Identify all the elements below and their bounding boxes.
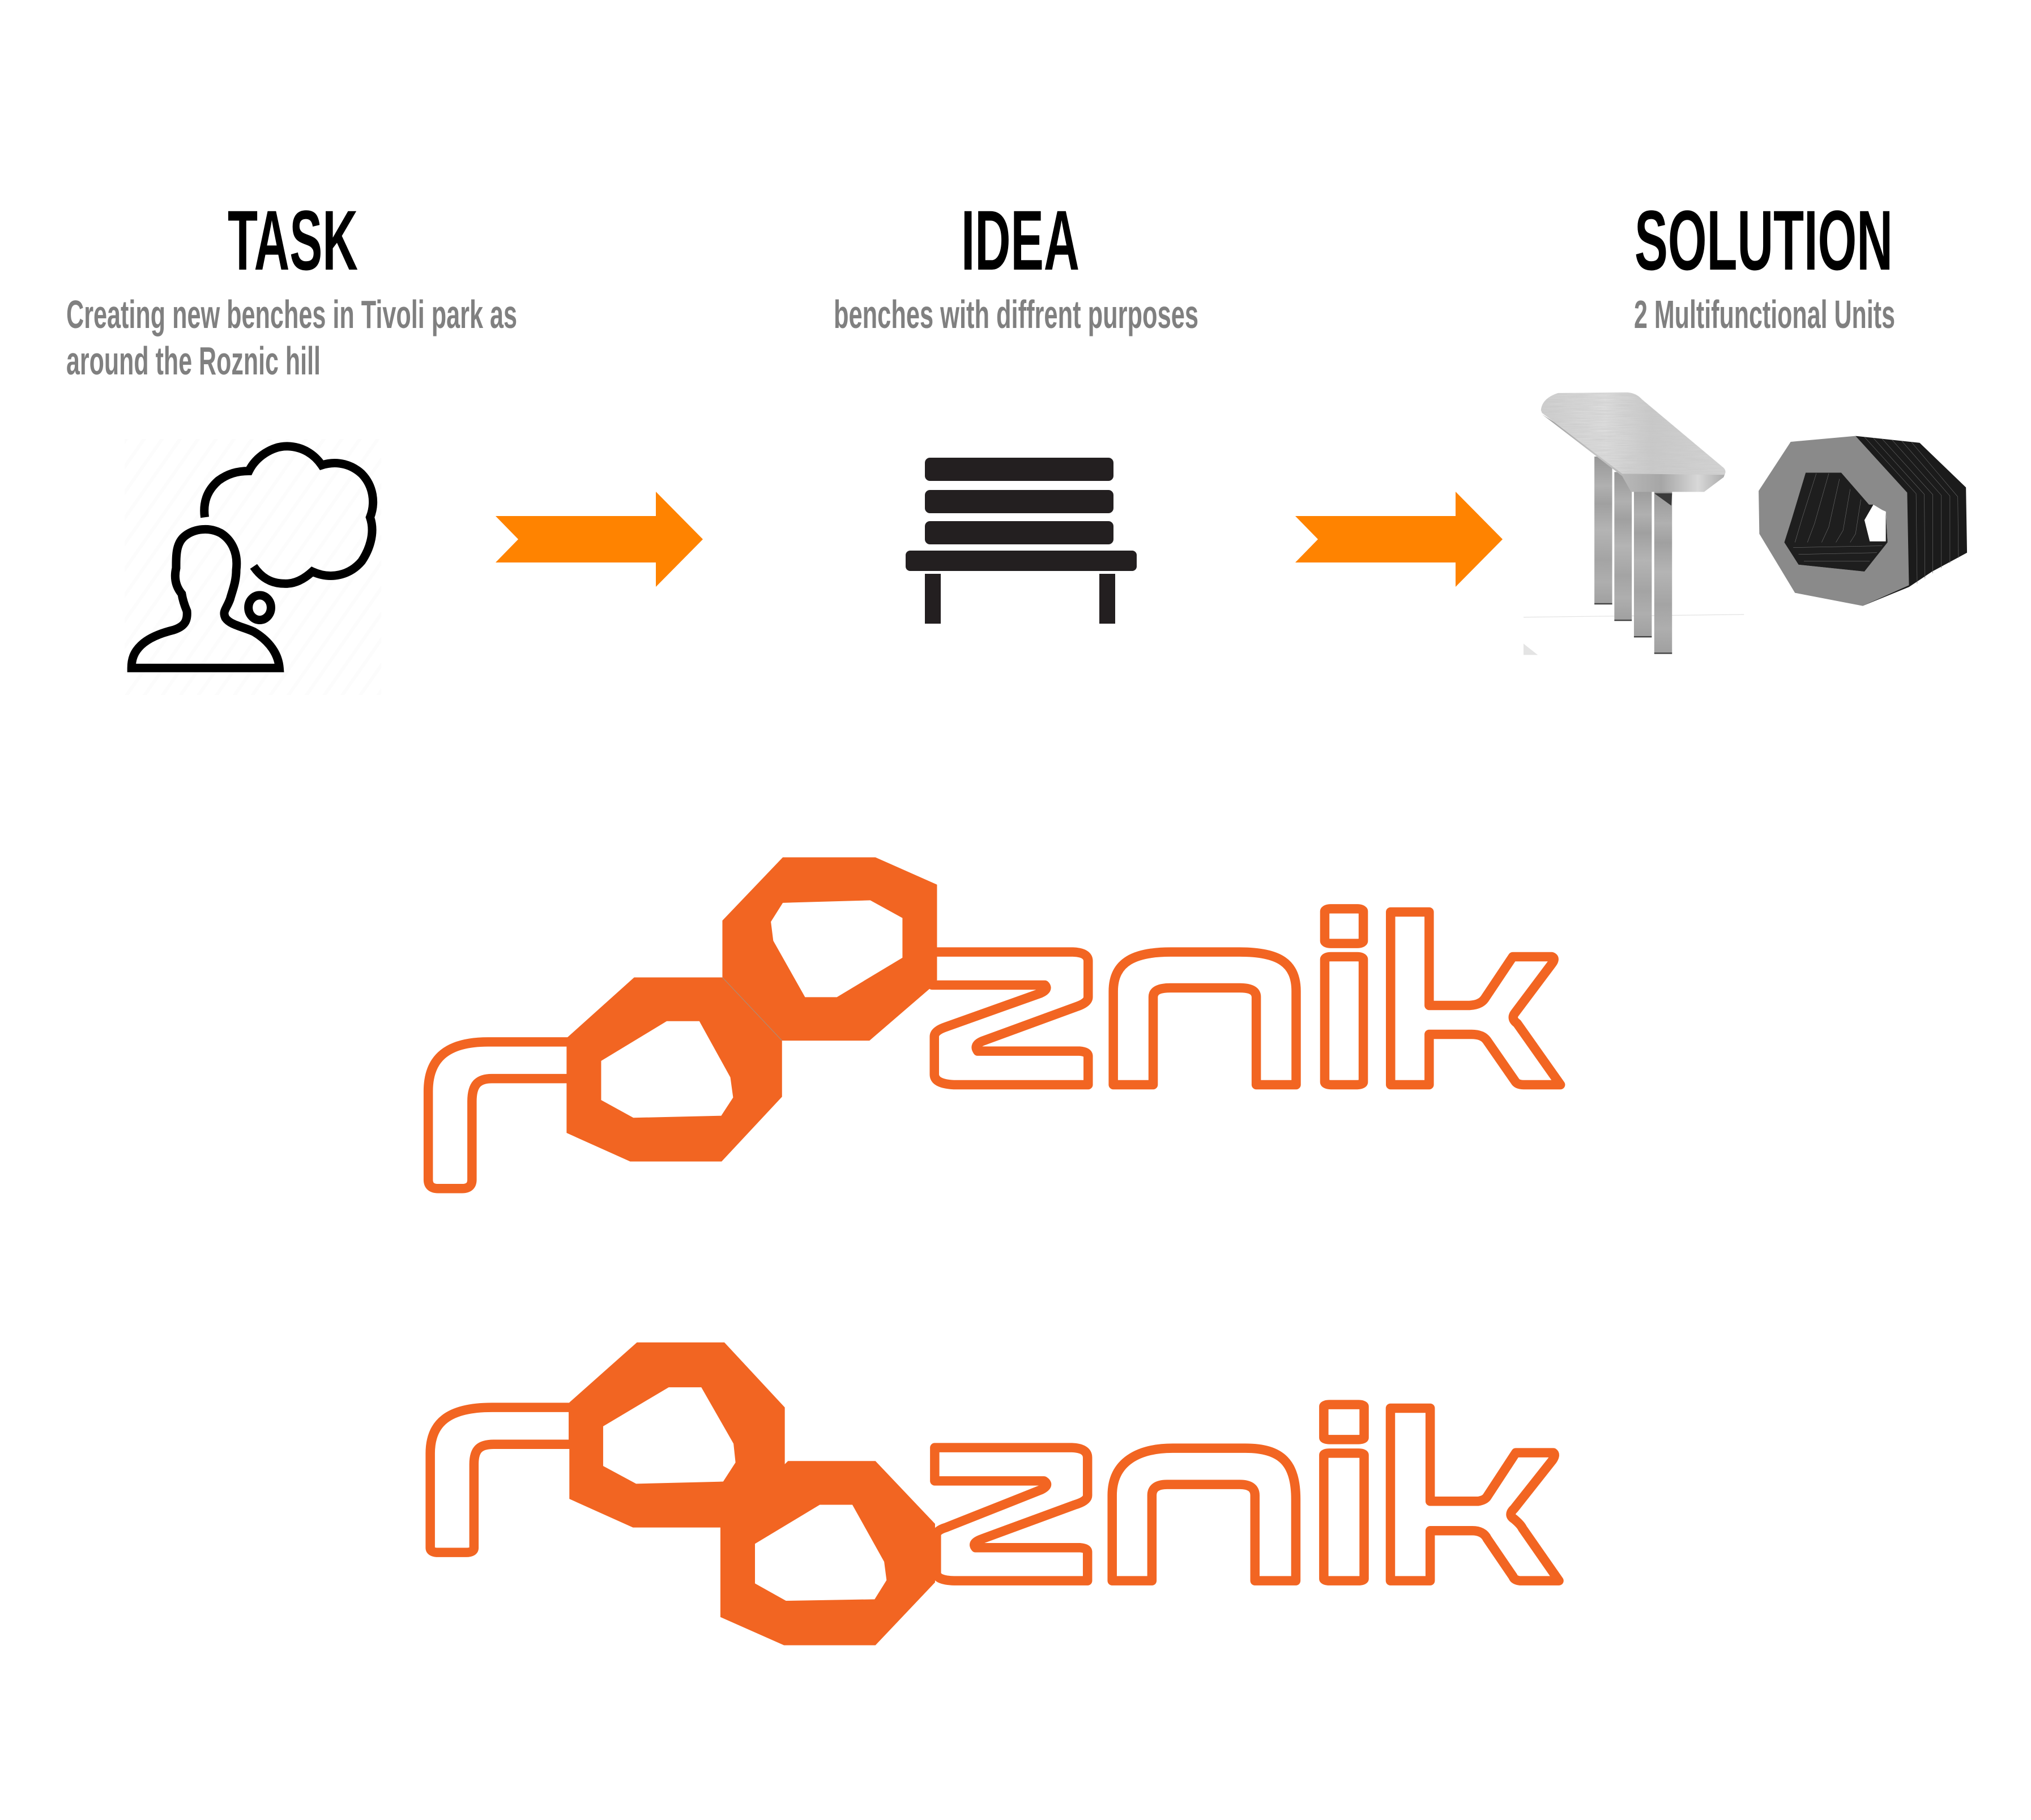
text: idea description: benches with diffrent purposes [834,292,1198,336]
logo: roznik, rising rings [428,857,1560,1188]
letter r [430,1408,573,1553]
logo: roznik, falling rings [430,1342,1559,1645]
text: task description: around the Roznic hill [66,339,321,383]
text: task description: Creating new benches in Tivoli park as [66,292,517,336]
icon: bench [906,458,1137,624]
heading: task: TASK [228,193,358,288]
letters z n i k [935,1405,1559,1581]
illustration: tunnel unit [1759,436,1967,606]
letter r [428,1042,571,1188]
illustration: bench unit [1524,393,1744,655]
text: task description [66,292,517,383]
arrow: idea to solution [1295,492,1503,587]
rings [569,1342,935,1645]
letters z n i k [932,909,1560,1085]
rings [566,857,937,1161]
heading: idea: IDEA [961,193,1079,288]
arrow: task to idea [496,492,703,587]
icon: person thinking [125,439,381,695]
